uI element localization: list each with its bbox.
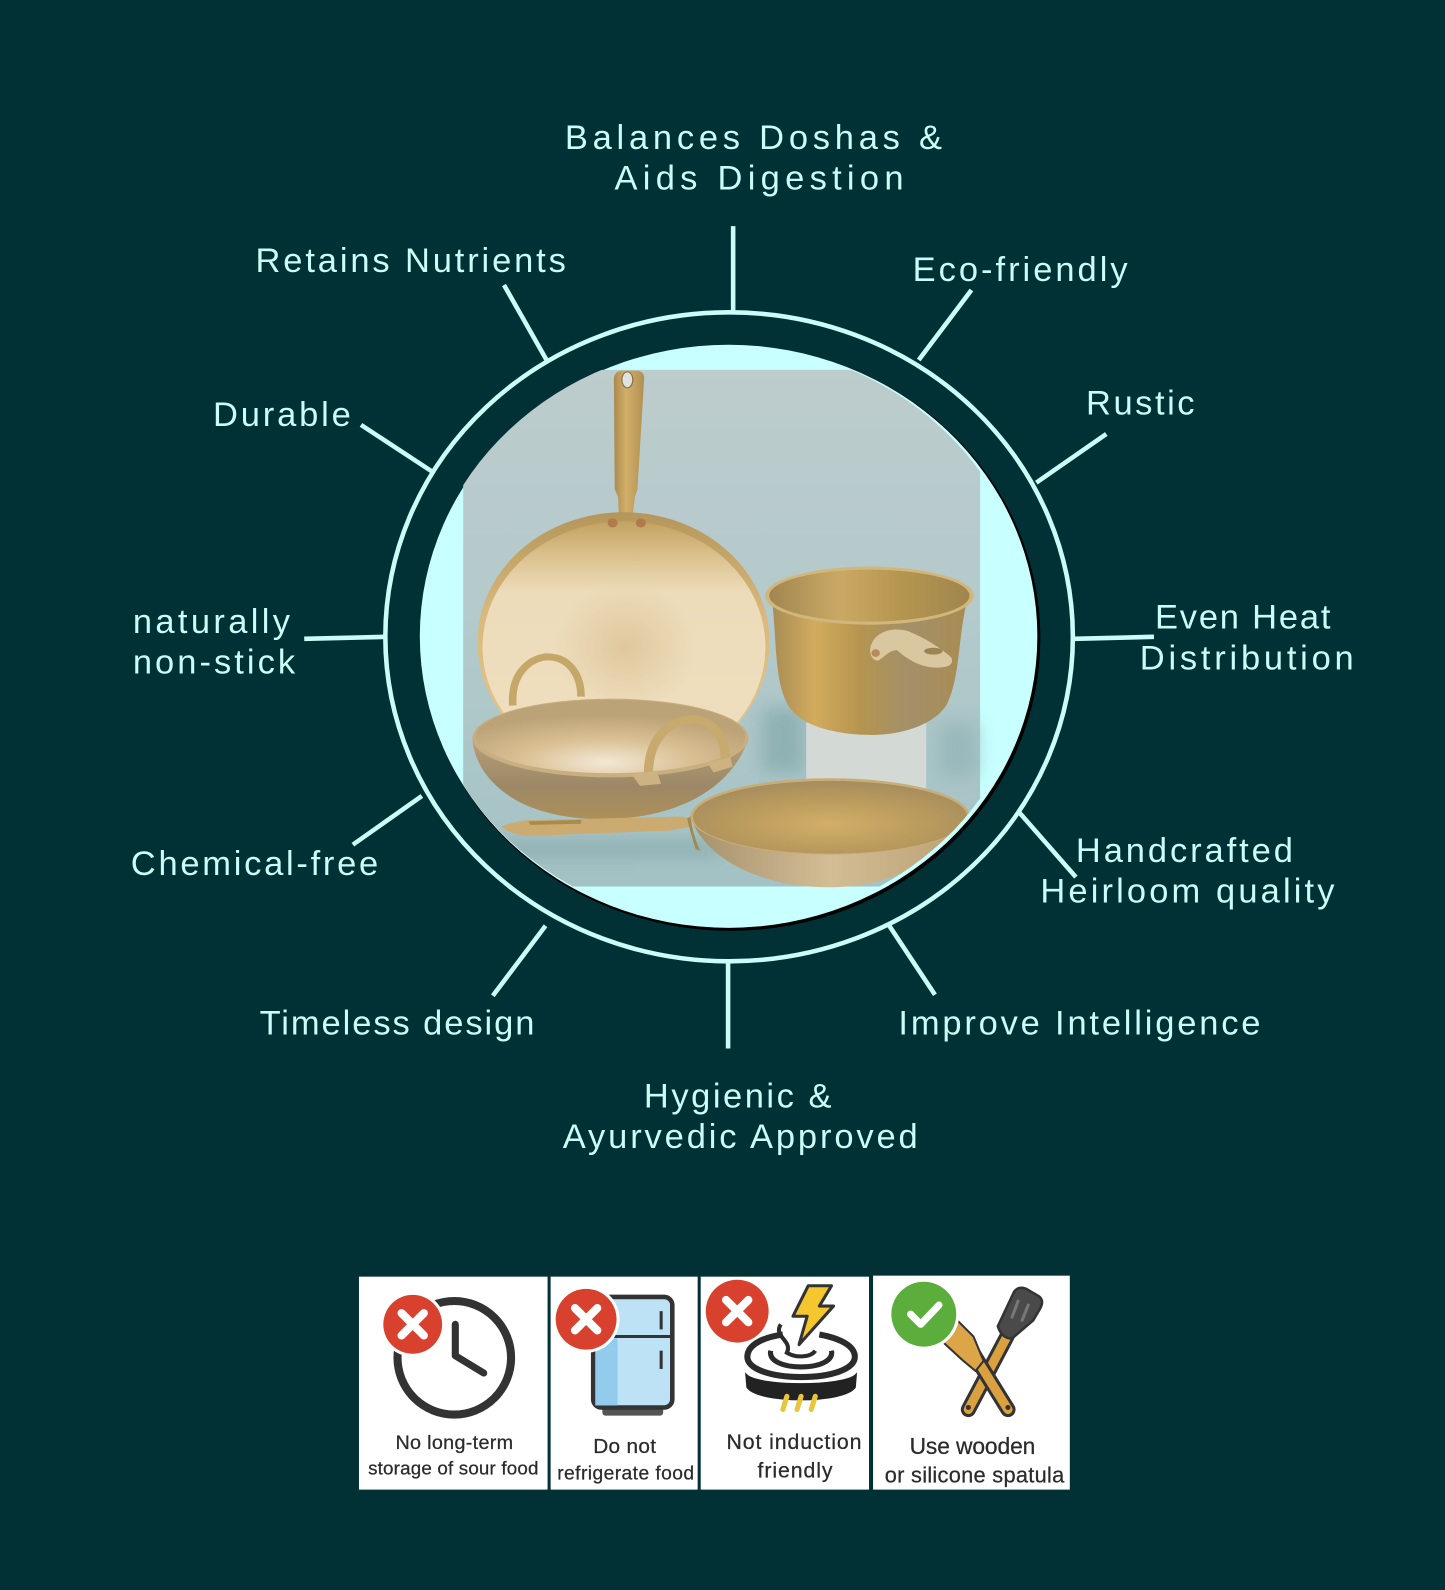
caption: Do not <box>593 1435 656 1458</box>
icon: induction burner with lightning <box>746 1286 856 1410</box>
benefit: Hygienic and Ayurvedic Approved <box>563 963 918 1156</box>
card: do not refrigerate food: refrigerate food <box>557 1463 694 1484</box>
benefit: Hygienic and Ayurvedic Approved: Ayurvedic Approved <box>563 1118 918 1156</box>
outer ring <box>385 312 1073 961</box>
tawa griddle <box>478 370 770 723</box>
benefit: Even Heat Distribution <box>1075 599 1354 677</box>
icon: clock <box>398 1301 511 1415</box>
caption: No long-term <box>395 1432 513 1454</box>
benefit: Eco-friendly <box>913 251 1128 360</box>
icon: red cross badge <box>380 1292 445 1357</box>
benefit: Handcrafted Heirloom quality <box>1019 812 1335 910</box>
card: not induction friendly <box>701 1277 869 1490</box>
caption: Not induction <box>727 1430 861 1454</box>
benefit: Durable <box>213 396 432 472</box>
benefit: naturally non-stick <box>133 603 386 681</box>
benefit: Improve Intelligence: Improve Intelligence <box>898 1004 1260 1042</box>
benefit: Even Heat Distribution: Distribution <box>1140 639 1354 677</box>
icon: crossed spatulas <box>939 1288 1042 1410</box>
infographic canvas <box>132 124 1352 1490</box>
benefit: Rustic: Rustic <box>1086 385 1195 423</box>
benefit: Handcrafted Heirloom quality: Heirloom quality <box>1040 872 1335 910</box>
pot <box>765 567 974 735</box>
benefit: Hygienic and Ayurvedic Approved: Hygienic & <box>644 1077 832 1115</box>
benefit: Even Heat Distribution: Even Heat <box>1155 599 1331 637</box>
table shadows <box>493 707 977 857</box>
marble pedestal <box>806 723 926 790</box>
benefit: Durable: Durable <box>213 396 351 434</box>
benefit: Retains Nutrients <box>256 242 566 360</box>
benefit: Improve Intelligence <box>889 926 1260 1042</box>
kadai wok <box>472 657 749 819</box>
card: no long-term storage of sour food: storage of sour food <box>368 1457 538 1478</box>
benefit: Timeless design <box>260 926 546 1042</box>
icon: fridge <box>593 1297 672 1416</box>
icon: red cross badge <box>704 1278 771 1345</box>
benefit: Eco-friendly: Eco-friendly <box>913 251 1128 289</box>
benefit: naturally non-stick: non-stick <box>133 643 296 681</box>
frying pan <box>501 778 970 887</box>
benefit: Handcrafted Heirloom quality: Handcrafted <box>1076 832 1293 870</box>
icon: green check badge <box>888 1279 959 1350</box>
benefit: Balances Doshas and Aids Digestion <box>565 119 942 314</box>
card: do not refrigerate food <box>551 1277 698 1490</box>
benefit: Chemical-free: Chemical-free <box>131 845 378 883</box>
icon: red cross badge <box>553 1286 620 1353</box>
benefit: Timeless design: Timeless design <box>260 1004 534 1042</box>
card: no long-term storage of sour food <box>359 1277 548 1490</box>
benefit: Balances Doshas and Aids Digestion: Balances Doshas & <box>565 119 942 157</box>
benefit: Rustic <box>1036 385 1195 483</box>
card: use wooden or silicone spatula: or silicone spatula <box>885 1463 1065 1488</box>
benefit: Balances Doshas and Aids Digestion: Aids Digestion <box>615 160 904 198</box>
card: use wooden or silicone spatula <box>873 1276 1070 1490</box>
product photo: brass cookware set <box>463 370 980 887</box>
card: not induction friendly: friendly <box>757 1458 833 1482</box>
benefit: naturally non-stick: naturally <box>133 603 291 641</box>
benefit: Chemical-free <box>131 796 422 883</box>
caption: Use wooden <box>910 1433 1035 1459</box>
inner circle with shadow <box>420 345 1040 931</box>
benefit: Retains Nutrients: Retains Nutrients <box>256 242 566 280</box>
